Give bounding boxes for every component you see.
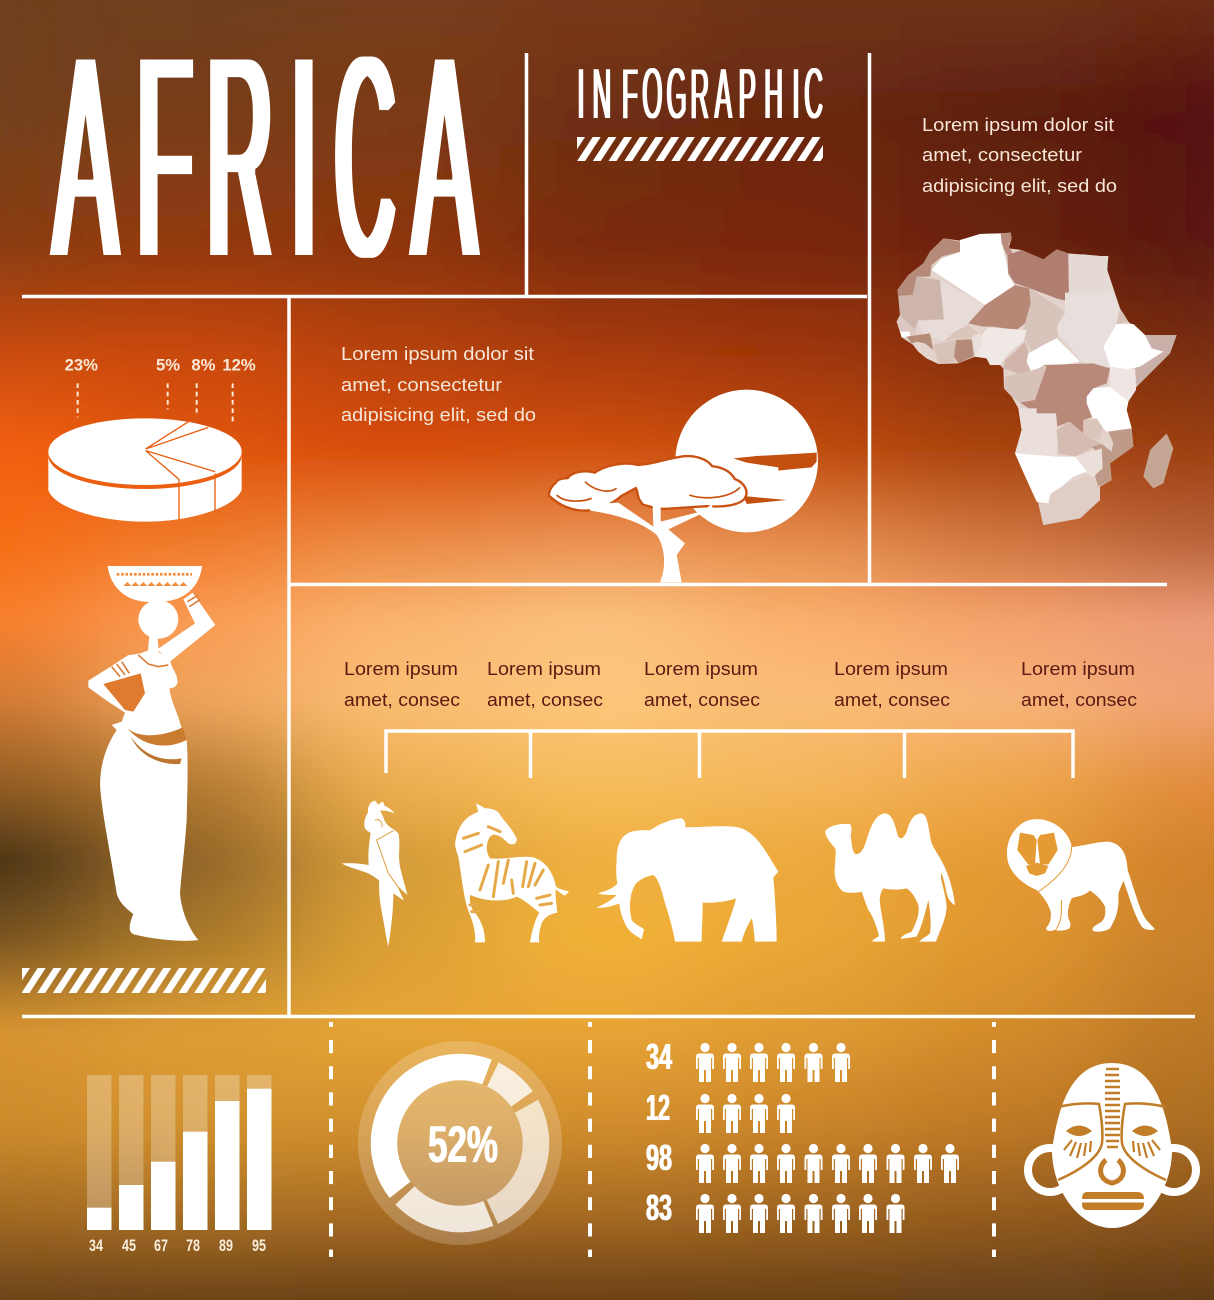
label 3: amet, consec (644, 690, 760, 710)
donut chart 52% (353, 1036, 567, 1250)
bar chart: 67 (154, 1237, 168, 1255)
text block: savanna panel: Lorem ipsum dolor sit (341, 344, 534, 364)
pie labels (65, 356, 256, 375)
title: AFRICA: A (54, 0, 117, 319)
title: AFRICA: F (137, 0, 192, 319)
hatch bar under subtitle (577, 137, 823, 161)
label 2 (487, 659, 603, 710)
donut chart 52%: 52% (428, 1116, 498, 1174)
text block: savanna panel (341, 344, 536, 425)
hatch bar under woman (22, 968, 266, 993)
icon: parrot (342, 801, 407, 947)
icon: woman carrying bowl (88, 566, 215, 941)
subtitle: INFOGRAPHIC: INFOGRAPHIC (577, 55, 823, 135)
title: AFRICA: I (291, 0, 316, 319)
label 5 (1021, 659, 1137, 710)
row 98: 98 (646, 1137, 672, 1178)
row 34: 34 (646, 1036, 672, 1077)
map of Africa (897, 233, 1177, 525)
bar chart: 89 (219, 1237, 233, 1255)
row 34 (646, 1036, 850, 1082)
label 3 (644, 659, 760, 710)
text block: savanna panel: adipisicing elit, sed do (341, 405, 536, 425)
row 83 (646, 1187, 904, 1233)
pie labels: 12% (222, 356, 256, 375)
icon: elephant (596, 818, 778, 942)
text block: top right: adipisicing elit, sed do (922, 176, 1117, 196)
label 5: amet, consec (1021, 690, 1137, 710)
row 12 (646, 1087, 795, 1133)
pie chart (48, 356, 256, 522)
text block: savanna panel: amet, consectetur (341, 375, 502, 395)
row 12: 12 (646, 1087, 670, 1128)
label 2: amet, consec (487, 690, 603, 710)
bar chart: 95 (252, 1237, 266, 1255)
title: AFRICA: C (335, 0, 395, 320)
label 1 (344, 659, 460, 710)
label 5: Lorem ipsum (1021, 659, 1135, 679)
row 98 (646, 1137, 959, 1183)
title: AFRICA: A (412, 0, 476, 319)
icon: sun and acacia tree (550, 390, 818, 582)
title: AFRICA: R (207, 0, 272, 319)
icon: zebra (455, 803, 569, 942)
text block: top right: Lorem ipsum dolor sit (922, 115, 1114, 135)
text block: top right: amet, consectetur (922, 145, 1082, 165)
pie labels: 8% (191, 356, 216, 375)
bar chart (87, 1075, 272, 1255)
animal labels (344, 659, 1137, 710)
connector bracket to animals (386, 731, 1073, 778)
text block: top right (922, 115, 1117, 196)
label 3: Lorem ipsum (644, 659, 758, 679)
icon: lion (1007, 819, 1155, 932)
label 1: Lorem ipsum (344, 659, 458, 679)
pie labels: 23% (65, 356, 98, 375)
icon: camel (825, 813, 955, 942)
pictogram chart (646, 1036, 959, 1233)
row 83: 83 (646, 1187, 672, 1228)
label 2: Lorem ipsum (487, 659, 601, 679)
label 4: Lorem ipsum (834, 659, 948, 679)
title: AFRICA (54, 0, 476, 320)
bar chart: 78 (186, 1237, 200, 1255)
label 4 (834, 659, 950, 710)
bar chart: 45 (122, 1237, 136, 1255)
label 1: amet, consec (344, 690, 460, 710)
bar chart: 34 (89, 1237, 104, 1255)
icon: tribal mask (1028, 1063, 1196, 1228)
pie labels: 5% (156, 356, 180, 375)
label 4: amet, consec (834, 690, 950, 710)
